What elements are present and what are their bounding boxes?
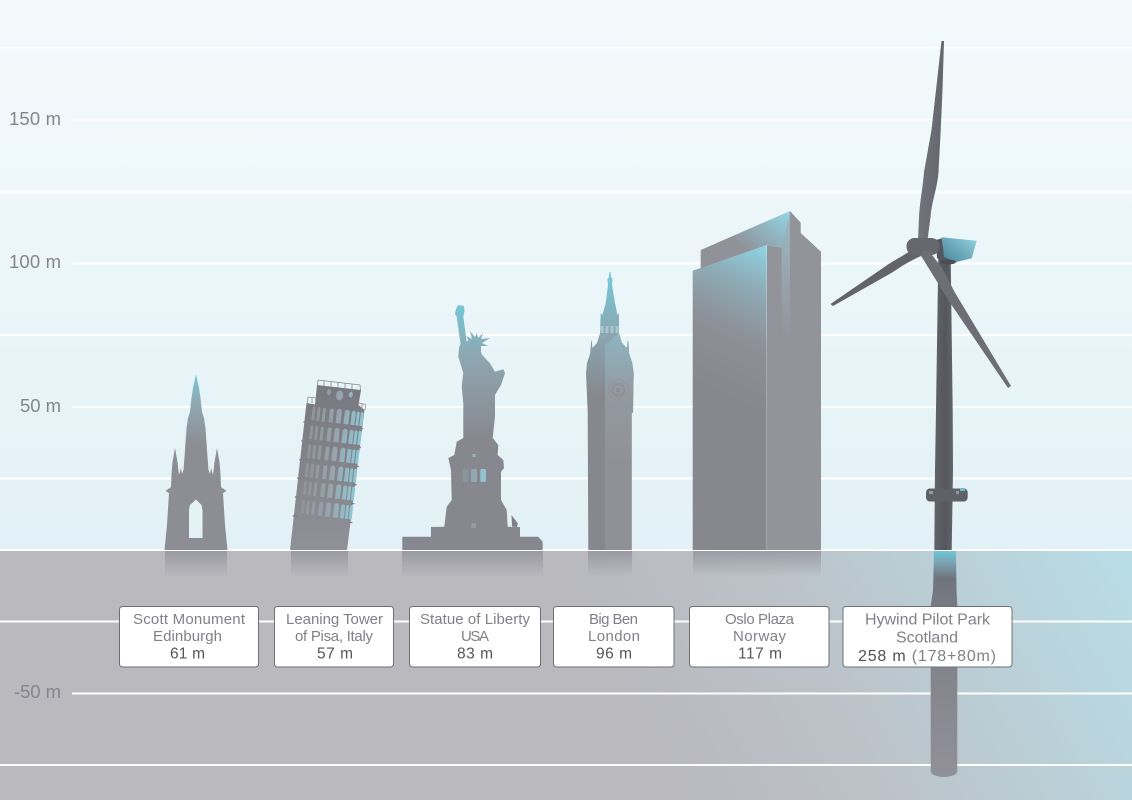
sky background	[0, 0, 1132, 551]
clock face	[608, 380, 628, 400]
landmark: Statue of Liberty	[402, 305, 543, 577]
label: Statue of Liberty: Statue of Liberty	[420, 611, 530, 628]
label: Leaning Tower of Pisa	[274, 606, 394, 667]
label: Big Ben: 96 m	[596, 646, 632, 662]
label: Scott Monument: Scott Monument	[133, 611, 246, 628]
landmark: Leaning Tower of Pisa	[290, 380, 367, 577]
label: Oslo Plaza	[690, 606, 829, 667]
submerged spar	[931, 551, 957, 777]
axis labels: -50 m	[14, 681, 61, 702]
reflection	[693, 551, 821, 577]
back upper face	[701, 211, 790, 270]
belfry openings	[600, 326, 618, 333]
landmark: Big Ben	[586, 272, 634, 577]
blade: lower right	[920, 250, 1011, 388]
landmark: Scott Monument	[164, 374, 228, 577]
front face	[693, 245, 767, 550]
reflection	[291, 551, 348, 577]
axis labels	[9, 108, 61, 702]
tower	[934, 258, 953, 550]
axis labels: 100 m	[9, 251, 61, 272]
label: Statue of Liberty: 83 m	[457, 646, 493, 662]
label: Big Ben: Big Ben	[589, 611, 638, 628]
sea and ground background	[0, 551, 1132, 800]
wind turbine: Hywind	[830, 41, 1011, 777]
label: Oslo Plaza: Norway	[733, 628, 786, 645]
label: Hywind Pilot Park	[843, 606, 1012, 667]
tower railings	[308, 380, 366, 410]
label: Leaning Tower of Pisa: Leaning Tower	[286, 611, 383, 628]
label: Big Ben: London	[588, 628, 640, 645]
label: Scott Monument	[120, 606, 258, 667]
central shaft highlight	[782, 211, 790, 350]
label: Hywind Pilot Park: 258 m (178+80m)	[858, 648, 996, 665]
hub	[906, 238, 940, 255]
label: Statue of Liberty: USA	[461, 628, 489, 645]
label: Leaning Tower of Pisa: of Pisa, Italy	[295, 628, 374, 645]
label: Big Ben	[554, 606, 674, 667]
tower windows and ledges	[293, 387, 367, 523]
service platform	[926, 488, 968, 502]
label: Scott Monument: 61 m	[170, 646, 205, 662]
right tower face	[767, 211, 821, 550]
landmark: Oslo Plaza	[693, 211, 821, 577]
label: Hywind Pilot Park: Hywind Pilot Park	[865, 612, 991, 628]
label: Oslo Plaza: Oslo Plaza	[725, 611, 795, 628]
label: Scott Monument: Edinburgh	[153, 628, 222, 645]
pedestal windows	[463, 454, 486, 528]
clock tower right face	[605, 333, 634, 550]
nacelle	[936, 237, 977, 264]
flag	[512, 515, 518, 527]
label: Oslo Plaza: 117 m	[738, 646, 782, 662]
axis labels: 150 m	[9, 108, 61, 129]
reflection	[588, 551, 632, 577]
blade: upper	[918, 41, 944, 240]
reflection	[165, 551, 227, 577]
axis labels: 50 m	[20, 395, 61, 416]
blade: lower left	[830, 247, 921, 306]
reflection	[402, 551, 543, 577]
label: Statue of Liberty	[410, 606, 540, 667]
label: Hywind Pilot Park: Scotland	[896, 630, 958, 646]
label: Leaning Tower of Pisa: 57 m	[317, 646, 353, 662]
